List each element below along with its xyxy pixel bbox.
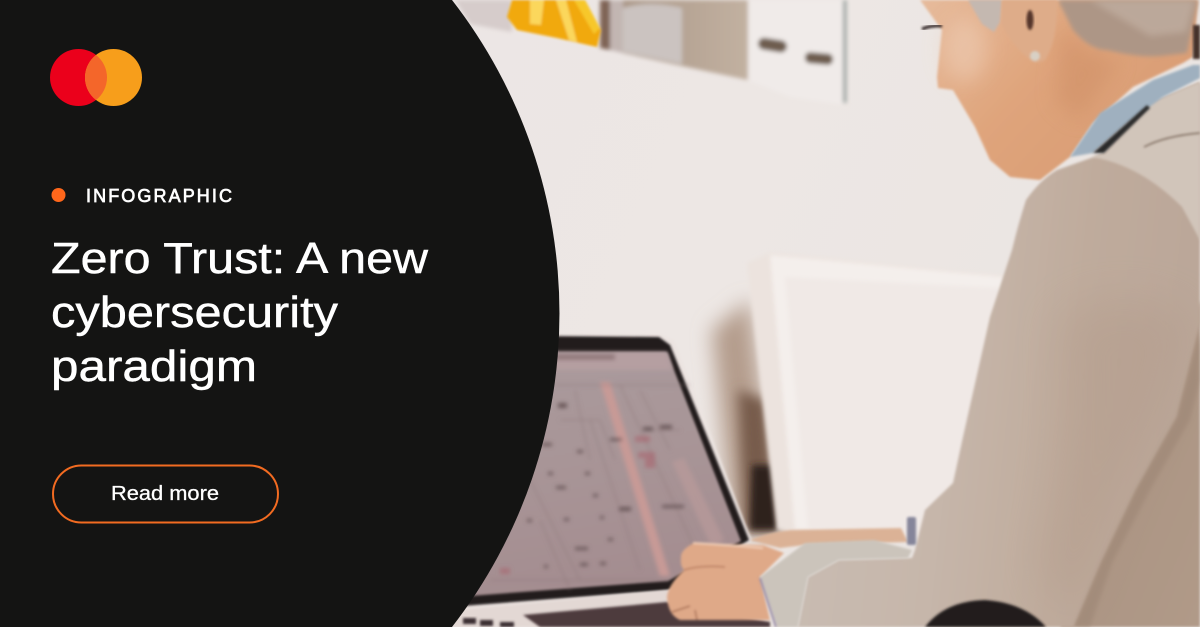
title: cybersecurity xyxy=(51,288,338,337)
coat body and arm xyxy=(798,82,1200,627)
orange circle xyxy=(85,49,142,106)
ear xyxy=(1002,0,1057,63)
title: Zero Trust: A new xyxy=(51,234,428,283)
lapel and shoulder panel xyxy=(1092,82,1200,240)
mid wall shadow xyxy=(738,390,778,532)
laptop screen with blurred floor plan xyxy=(470,352,741,596)
side keys xyxy=(463,618,514,627)
panel side xyxy=(747,253,1005,540)
hair front xyxy=(968,0,1002,32)
icon: yellow vase xyxy=(507,0,601,47)
soft wall shadow xyxy=(712,300,778,532)
laptop bezel xyxy=(460,333,752,612)
title xyxy=(51,234,428,391)
dark hair edge xyxy=(1193,25,1200,59)
knit cuff xyxy=(760,540,912,627)
white panel leaning on the wall xyxy=(712,253,1005,540)
hair back xyxy=(1058,0,1198,56)
title: paradigm xyxy=(51,342,257,391)
woman xyxy=(760,0,1200,627)
wall xyxy=(440,0,1200,627)
dark sleeve at bottom xyxy=(925,600,1046,627)
deep wall shadow xyxy=(750,465,778,530)
read more button xyxy=(53,466,278,522)
body back fold xyxy=(1074,330,1200,627)
logo overlap xyxy=(85,55,107,100)
cheek highlight xyxy=(943,18,987,82)
coat back xyxy=(1060,300,1200,627)
neck and face xyxy=(920,0,1198,180)
eyebrow text: INFOGRAPHIC xyxy=(86,186,232,206)
lapel line xyxy=(1144,133,1200,147)
panel inner xyxy=(785,277,1000,540)
bracelet xyxy=(907,517,916,545)
coat shading xyxy=(1040,300,1190,620)
dark circular panel xyxy=(0,0,559,627)
laptop xyxy=(445,333,770,627)
cuff edge xyxy=(760,578,776,627)
earring xyxy=(1030,51,1040,61)
hair highlight xyxy=(1090,0,1195,36)
shelf with objects xyxy=(455,0,846,105)
panel frame xyxy=(770,255,1005,540)
ear canal xyxy=(1026,10,1034,30)
eyelashes xyxy=(922,26,942,29)
keyboard xyxy=(523,602,770,627)
collar shadow xyxy=(1093,105,1150,153)
laptop base xyxy=(445,590,770,627)
red circle xyxy=(50,49,107,106)
background photo: woman working at laptop xyxy=(440,0,1200,627)
Mastercard logo xyxy=(50,49,142,106)
neck shadow behind ear xyxy=(1055,20,1120,120)
shirt collar xyxy=(1070,65,1200,157)
orange dot xyxy=(52,188,66,202)
read more button: Read more xyxy=(111,482,219,505)
eyebrow label xyxy=(52,186,232,206)
typing hands xyxy=(667,528,908,620)
